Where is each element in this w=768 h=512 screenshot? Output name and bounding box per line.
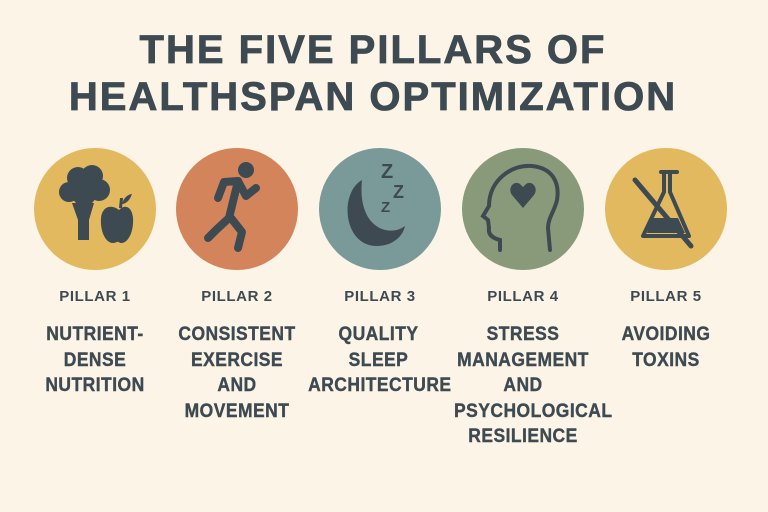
text: nutrition	[45, 324, 145, 396]
text: toxins	[622, 324, 710, 370]
title: HEALTHSPAN OPTIMIZATION	[69, 75, 677, 119]
text: stress: MANAGEMENT	[457, 350, 589, 370]
pillar 4	[454, 148, 612, 447]
text: toxins: TOXINS	[632, 350, 700, 370]
text: sleep: ARCHITECTURE	[308, 375, 452, 396]
title	[69, 28, 677, 119]
title: THE FIVE PILLARS OF	[140, 28, 606, 72]
text: exercise: MOVEMENT	[185, 400, 289, 422]
text: exercise	[178, 324, 296, 422]
text: sleep	[308, 324, 452, 396]
text: nutrition: NUTRIENT-	[46, 324, 144, 345]
label: pillar 4: PILLAR 4	[487, 288, 559, 305]
label: pillar 5: PILLAR 5	[630, 288, 702, 305]
pillar 1	[34, 148, 156, 396]
text: exercise: CONSISTENT	[178, 324, 296, 345]
icon: moon and zzz: Z	[381, 161, 393, 183]
label: pillar 3: PILLAR 3	[344, 288, 416, 305]
icon: crossed flask	[605, 148, 727, 270]
text: stress: STRESS	[487, 324, 559, 345]
pillar 5	[605, 148, 727, 370]
text: stress	[454, 324, 612, 447]
label: pillar 2: PILLAR 2	[201, 288, 273, 305]
text: nutrition: DENSE	[64, 350, 126, 370]
text: stress: PSYCHOLOGICAL	[454, 400, 612, 422]
text: sleep: QUALITY	[339, 324, 418, 345]
pillar 2	[176, 148, 298, 422]
icon: moon and zzz	[319, 148, 441, 270]
text: nutrition: NUTRITION	[45, 375, 145, 396]
text: exercise: AND	[217, 375, 257, 396]
text: toxins: AVOIDING	[622, 324, 710, 345]
icon: runner	[176, 148, 298, 270]
pillar 3	[308, 148, 452, 396]
text: stress: AND	[503, 375, 543, 396]
icon: moon and zzz: Z	[381, 199, 390, 216]
label: pillar 1: PILLAR 1	[59, 288, 131, 305]
text: stress: RESILIENCE	[468, 426, 578, 447]
icon: broccoli and apple	[34, 148, 156, 270]
icon: moon and zzz: Z	[393, 182, 404, 202]
text: sleep: SLEEP	[349, 350, 408, 370]
text: exercise: EXERCISE	[191, 350, 283, 370]
icon: head with heart	[462, 148, 584, 270]
